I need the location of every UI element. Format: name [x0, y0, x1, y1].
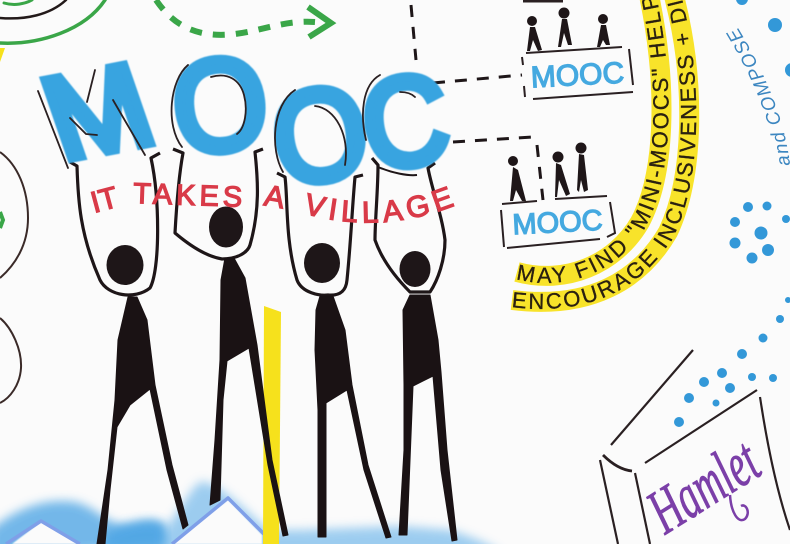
figure 2 [173, 149, 288, 536]
letter O: O [166, 27, 274, 182]
mini MOOC 1: MOOC [530, 57, 625, 94]
mini MOOC 1 [522, 1, 633, 99]
figure 1 [70, 153, 188, 544]
book: Hamlet: Hamlet [634, 425, 772, 544]
tagline: it takes a village: IT [87, 181, 122, 220]
yellow band: may find mini-moocs help: MAY FIND "MINI-MOOCS" HELP [517, 0, 669, 284]
mini MOOC 2: MOOC [512, 205, 603, 241]
green dashed arrow [156, 0, 331, 37]
book: Hamlet [600, 350, 790, 544]
tagline: it takes a village: VILLAGE [307, 186, 455, 224]
letter M: M [27, 39, 169, 185]
left edge circles [0, 152, 28, 403]
tagline: it takes a village: TAKES [133, 178, 247, 214]
black shadow lines on letters [38, 65, 415, 172]
yellow vertical marker stripe [263, 306, 281, 544]
blue dots [674, 0, 790, 427]
top left green and black circles [0, 0, 105, 62]
letter C: C [353, 46, 457, 197]
blue water wash [0, 482, 505, 544]
mini MOOC 2 [501, 142, 615, 248]
tagline: it takes a village [87, 178, 455, 224]
figure 4 [372, 158, 457, 541]
black dashed connectors [411, 5, 543, 200]
letter O second: O [263, 56, 377, 214]
figure 3 [277, 173, 391, 538]
yellow band: encourage inclusiveness: ENCOURAGE INCLUSIVENESS + DI [513, 0, 696, 310]
tagline: it takes a village: A [262, 179, 287, 215]
big MOOC letters [27, 27, 457, 214]
